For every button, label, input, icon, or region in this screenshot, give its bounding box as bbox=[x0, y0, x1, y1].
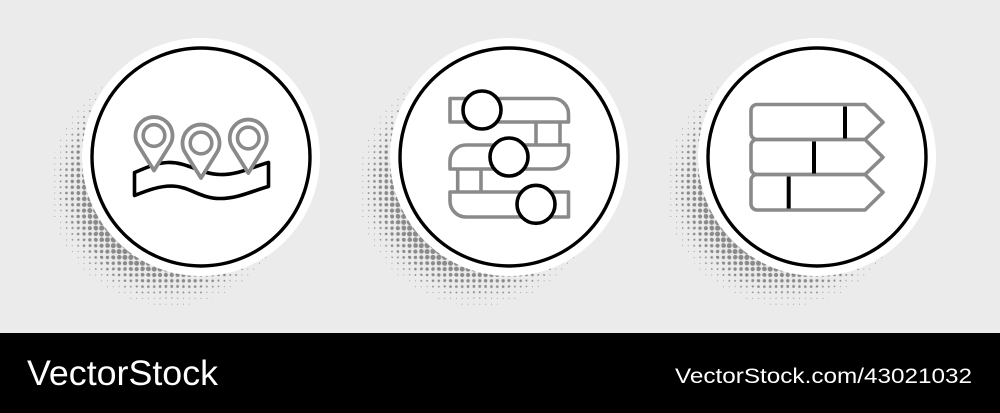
arrow bar outlines bbox=[751, 104, 883, 210]
pin 1 bbox=[136, 117, 172, 170]
panel: arrow bars badge bbox=[666, 38, 936, 306]
white circle right bbox=[698, 38, 936, 276]
gray bars and connectors bbox=[450, 98, 568, 217]
pin 2 bbox=[182, 125, 220, 178]
panel: map pins badge bbox=[50, 38, 320, 306]
slider knob 2 bbox=[490, 138, 528, 176]
slider knob 3 bbox=[517, 185, 555, 223]
panel: sliders badge bbox=[358, 38, 628, 306]
white circle middle bbox=[390, 38, 628, 276]
footer bar bbox=[0, 333, 1000, 413]
white circle left bbox=[82, 38, 320, 276]
black ring middle bbox=[400, 48, 618, 266]
wordmark: VectorStock bbox=[27, 353, 218, 393]
icon: connected slider bars bbox=[450, 91, 568, 223]
pin 3 bbox=[230, 120, 267, 173]
ribbon bbox=[134, 162, 268, 198]
icon: route ribbon with location pins bbox=[134, 117, 268, 198]
black progress markers bbox=[789, 106, 845, 208]
icon: stacked arrow bars bbox=[751, 104, 883, 210]
black ring left bbox=[92, 48, 310, 266]
image url: VectorStock.com/43021032 bbox=[675, 365, 972, 388]
black ring right bbox=[708, 48, 926, 266]
halftone shadow left bbox=[50, 66, 290, 306]
halftone shadow right bbox=[666, 66, 906, 306]
slider knob 1 bbox=[463, 91, 501, 129]
halftone shadow middle bbox=[358, 66, 598, 306]
